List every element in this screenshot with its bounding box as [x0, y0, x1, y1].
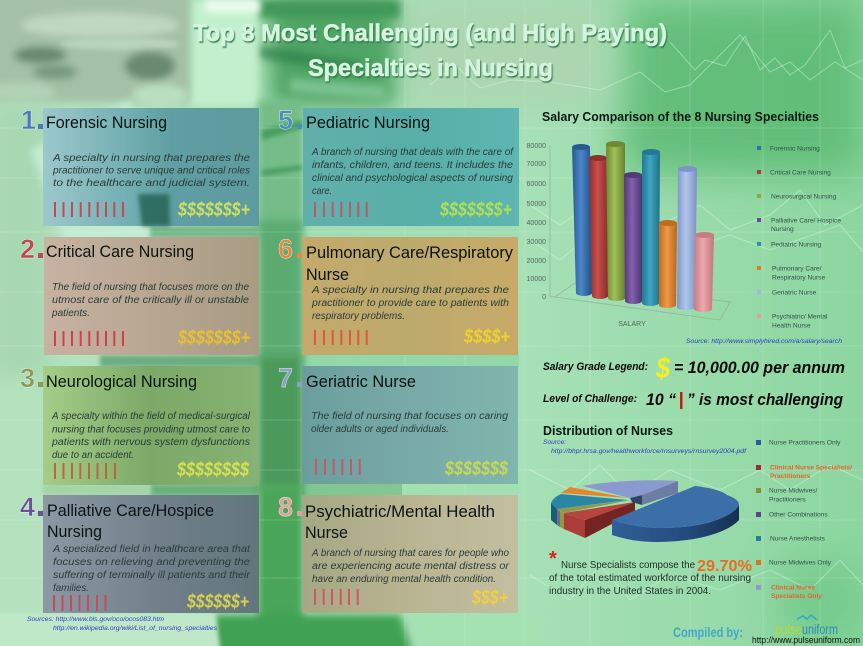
panel: palliative care nursing: 4 — [20, 492, 35, 522]
callout: nurse specialists share: of the total estimated workforce of the nursing — [549, 572, 751, 584]
panel: pulmonary care nursing: 6 — [278, 234, 293, 264]
panel: critical care nursing: $$$$$$$+ — [177, 328, 250, 349]
panel: pediatric nursing: Pediatric Nursing — [306, 114, 430, 132]
panel: pediatric nursing: infants, children, and teens. It includes the — [312, 160, 514, 171]
callout: nurse specialists share: * — [549, 548, 557, 570]
title — [193, 20, 667, 82]
panel: forensic nursing: practitioner to serve unique and critical roles — [52, 166, 250, 176]
chart legend: distribution: Other Combinations — [769, 512, 828, 518]
chart legend: salary: Pediatric Nursing — [771, 242, 822, 248]
sources: specialty definitions: Sources: http://www.bls.gov/oco/ocos083.htm — [27, 616, 164, 623]
bar chart: salary comparison: 40000 — [527, 220, 546, 227]
chart legend: salary: Forensic Nursing — [770, 146, 820, 152]
panel: pulmonary care nursing — [278, 234, 518, 355]
bar chart: salary comparison: SALARY — [618, 321, 646, 328]
panel: geriatric nurse: The field of nursing that focuses on caring — [311, 411, 509, 422]
compiled by credit: Compiled by: — [673, 624, 743, 640]
chart legend: distribution: Nurse Midwives/ — [769, 488, 818, 494]
level of challenge legend: 10 “ — [646, 391, 677, 409]
callout: nurse specialists share: industry in the United States in 2004. — [549, 585, 711, 597]
panel: palliative care nursing: $$$$$$+ — [186, 592, 249, 613]
callout: nurse specialists share: Nurse Specialists compose the — [561, 559, 695, 571]
chart legend: distribution: Clinical Nurse — [771, 584, 815, 592]
source: distribution: Source: — [543, 439, 566, 446]
panel: psychiatric nurse: $$$+ — [471, 588, 508, 609]
panel: psychiatric nurse: are experiencing acute mental distress or — [312, 561, 510, 572]
chart legend: salary — [757, 146, 841, 330]
chart legend: salary: Pulmonary Care/ — [772, 266, 822, 272]
panel: pediatric nursing: $$$$$$$+ — [439, 200, 512, 221]
chart legend: salary: Critical Care Nursing — [770, 170, 831, 176]
panel: geriatric nurse — [278, 363, 518, 484]
panel: critical care nursing — [20, 234, 259, 355]
panel: pediatric nursing: 5 — [278, 105, 293, 135]
panel: critical care nursing: Critical Care Nursing — [46, 243, 194, 261]
source: salary: Source: http://www.simplyhired.com/a/salary/search — [686, 338, 842, 345]
panel: critical care nursing: patients. — [51, 308, 90, 319]
panel: critical care nursing: 2 — [20, 234, 35, 264]
bar chart: salary comparison: 80000 — [527, 143, 546, 150]
panel: forensic nursing: 1 — [21, 105, 36, 135]
logo: pulseuniform — [775, 615, 838, 637]
title: Specialties in Nursing — [308, 55, 553, 82]
panel: neurological nursing: 3 — [20, 363, 35, 393]
logo: pulseuniform: pulse — [775, 621, 802, 637]
panel: psychiatric nurse: Nurse — [305, 524, 348, 542]
panel: pediatric nursing: A branch of nursing that deals with the care of — [311, 147, 514, 158]
panel: neurological nursing: due to an accident. — [52, 450, 134, 461]
panel: neurological nursing: Neurological Nursing — [46, 373, 197, 391]
source: distribution: http://bhpr.hrsa.gov/healthworkforce/rnsurveys/rnsurvey2004.pdf — [551, 448, 747, 455]
chart legend: salary: Neurosurgical Nursing — [771, 194, 837, 200]
level of challenge legend: Level of Challenge: — [543, 393, 637, 405]
chart legend: distribution: Practitioners — [769, 496, 806, 504]
logo: pulseuniform: uniform — [802, 621, 838, 637]
salary grade legend: Salary Grade Legend: — [543, 361, 648, 373]
panel: geriatric nurse: 7 — [278, 363, 293, 393]
chart legend: salary: Health Nurse — [772, 322, 811, 330]
panel: neurological nursing: $$$$$$$$ — [176, 460, 249, 481]
panel: palliative care nursing: suffering of terminally ill patients and their — [53, 570, 251, 581]
panel: palliative care nursing — [20, 492, 259, 613]
panel: pediatric nursing: care. — [312, 186, 332, 197]
source: distribution — [543, 439, 747, 455]
title: Top 8 Most Challenging (and High Paying) — [193, 20, 667, 47]
chart legend: salary: Respiratory Nurse — [772, 274, 825, 282]
panel: palliative care nursing: families. — [53, 583, 89, 594]
panel: pulmonary care nursing: Pulmonary Care/Respiratory — [306, 244, 514, 262]
callout: nurse specialists share — [549, 548, 752, 597]
bar chart: salary comparison: 70000 — [527, 161, 546, 168]
level of challenge legend: ” is most challenging — [687, 391, 843, 409]
heading: salary comparison: Salary Comparison of the 8 Nursing Specialties — [542, 110, 819, 124]
level of challenge legend — [543, 391, 843, 409]
panel: critical care nursing: utmost care of the critically ill or unstable — [52, 295, 250, 306]
callout: nurse specialists share: 29.70% — [697, 558, 752, 575]
panel: psychiatric nurse: Psychiatric/Mental Health — [305, 503, 495, 521]
bar chart: salary comparison: 30000 — [527, 239, 546, 246]
pie chart: distribution of nurses — [551, 480, 739, 542]
panel: pulmonary care nursing: $$$$+ — [463, 327, 510, 348]
salary grade legend: = 10,000.00 per annum — [674, 359, 845, 377]
panel: pediatric nursing: clinical and psychological aspects of nursing — [312, 173, 514, 184]
panel: geriatric nurse: $$$$$$$ — [444, 459, 508, 480]
bar chart: salary comparison: 0 — [542, 294, 546, 301]
panel: pulmonary care nursing: respiratory problems. — [312, 311, 405, 322]
panel: pediatric nursing — [278, 105, 519, 226]
panel: forensic nursing — [21, 105, 259, 226]
panel: palliative care nursing: focuses on relieving and preventing the — [53, 557, 251, 568]
panel: palliative care nursing: Palliative Care/Hospice — [47, 502, 214, 520]
bar chart: salary comparison: 50000 — [527, 201, 546, 208]
chart legend: distribution: Specialists Only — [771, 593, 822, 600]
chart legend: distribution — [756, 440, 852, 600]
panel: psychiatric nurse: 8 — [278, 492, 293, 522]
chart legend: salary: Nursing — [771, 226, 794, 233]
chart legend: salary: Palliative Care/ Hospice — [771, 218, 841, 224]
panel: neurological nursing — [20, 363, 259, 485]
panel: geriatric nurse: older adults or aged individuals. — [311, 424, 449, 435]
panel: neurological nursing: A specialty within the field of medical-surgical — [51, 411, 251, 422]
bar chart: salary comparison: 60000 — [527, 181, 546, 188]
chart legend: distribution: Nurse Practitioners Only — [769, 440, 841, 446]
panel: forensic nursing: $$$$$$$+ — [177, 200, 250, 221]
panel: forensic nursing: to the healthcare and judicial system. — [53, 178, 250, 189]
chart legend: salary: Psychiatric/ Mental — [772, 314, 828, 320]
panel: neurological nursing: patients with nervous system dysfunctions — [51, 437, 250, 448]
panel: palliative care nursing: A specialized field in healthcare area that — [52, 544, 251, 555]
bar chart: salary comparison: 10000 — [527, 276, 546, 283]
bar chart: salary comparison — [527, 141, 730, 328]
chart legend: distribution: Clinical Nurse Specialists/ — [770, 464, 852, 472]
panel: neurological nursing: nursing that focuses providing utmost care to — [52, 424, 251, 436]
panel: pulmonary care nursing: A specialty in nursing that prepares the — [311, 285, 510, 296]
sources: specialty definitions — [27, 616, 218, 632]
chart legend: salary: Geriatric Nurse — [772, 290, 817, 296]
chart legend: distribution: Practitioners — [770, 473, 811, 480]
bar chart: salary comparison: 20000 — [527, 258, 546, 265]
chart legend: distribution: Nurse Anesthetists — [770, 536, 826, 542]
panel: psychiatric nurse: A branch of nursing that cares for people who — [311, 548, 510, 559]
salary grade legend — [543, 353, 845, 385]
panel: forensic nursing: Forensic Nursing — [46, 114, 167, 132]
salary grade legend: $ — [655, 353, 671, 385]
panel: forensic nursing: A specialty in nursing that prepares the — [52, 153, 251, 164]
panel: pulmonary care nursing: Nurse — [306, 266, 349, 284]
chart legend: distribution: Nurse Midwives Only — [769, 560, 832, 566]
panel: pulmonary care nursing: practitioner to provide care to patients with — [311, 298, 509, 309]
panel: geriatric nurse: Geriatric Nurse — [306, 373, 416, 391]
panel: psychiatric nurse: have an enduring mental health condition. — [312, 574, 496, 585]
panel: palliative care nursing: Nursing — [47, 523, 102, 541]
panel: critical care nursing: The field of nursing that focuses more on the — [52, 282, 250, 293]
sources: specialty definitions: http://en.wikipedia.org/wiki/List_of_nursing_specialties — [53, 625, 218, 632]
panel: psychiatric nurse — [278, 492, 518, 613]
heading: distribution of nurses: Distribution of Nurses — [543, 423, 673, 438]
